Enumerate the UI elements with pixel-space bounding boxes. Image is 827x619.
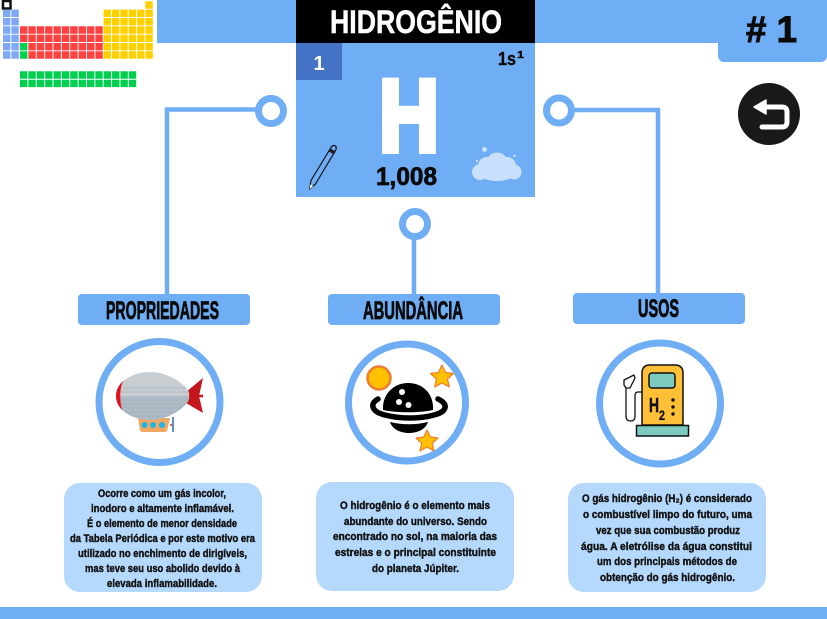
connector: usos — [546, 98, 658, 293]
electron configuration: 1s — [498, 49, 516, 69]
text block: propriedades — [64, 483, 262, 592]
heading: usos: USOS — [638, 295, 679, 323]
text block: propriedades: É o elemento de menor densidade — [87, 517, 237, 530]
element symbol: H — [379, 59, 439, 173]
icon: hydrogen fuel pump — [600, 343, 720, 464]
ranking number: # 1 — [746, 9, 797, 50]
text block: abundancia: encontrado no sol, na maioria das — [333, 531, 497, 543]
element number tab — [718, 9, 827, 62]
top bar — [157, 0, 827, 43]
atomic mass: 1,008 — [376, 163, 437, 191]
icon: cloud — [472, 147, 522, 181]
text block: propriedades: Ocorre como um gás incolor, — [98, 488, 226, 500]
title: HIDROGÊNIO — [330, 4, 502, 40]
text block: propriedades: inodoro e altamente inflamável. — [91, 503, 234, 515]
text block: propriedades: da Tabela Periódica e por este motivo era — [70, 533, 256, 545]
periodic table locator — [3, 1, 154, 83]
bottom bar — [0, 607, 827, 619]
text block: abundancia: abundante do universo. Sendo — [344, 516, 487, 528]
text block: propriedades: mas teve seu uso abolido devido à — [85, 563, 241, 575]
icon: planet and stars — [348, 344, 466, 461]
atomic number: 1 — [313, 53, 325, 75]
text block: usos: água. A eletrólise da água constitui — [581, 541, 752, 553]
heading: usos — [573, 293, 745, 324]
icon: hydrogen fuel pump: 2 — [659, 407, 665, 423]
text block: propriedades: elevada inflamabilidade. — [107, 578, 217, 590]
heading: propriedades — [78, 294, 250, 325]
electron configuration: 1 — [517, 50, 525, 61]
text block: usos: o combustível limpo do futuro, uma — [583, 509, 753, 521]
text block: abundancia: estrelas e o principal constituinte — [335, 547, 496, 559]
heading: abundancia: ABUNDÂNCIA — [363, 295, 463, 325]
atomic number — [296, 43, 342, 80]
heading: abundancia — [328, 294, 500, 325]
connector: abundancia — [402, 212, 428, 294]
text block: usos: obtenção do gás hidrogênio. — [600, 572, 735, 584]
text block: usos — [568, 483, 766, 592]
text block: usos: O gás hidrogênio (H₂) é considerado — [582, 493, 752, 505]
text block: abundancia: O hidrogênio é o elemento mais — [340, 500, 490, 512]
icon: pencil — [310, 146, 336, 189]
text block: usos: vez que sua combustão produz — [596, 525, 740, 537]
text block: propriedades: utilizado no enchimento de dirigíveis, — [78, 548, 247, 560]
connector: propriedades — [167, 98, 284, 294]
panel: element card — [296, 43, 535, 197]
text block: usos: um dos principais métodos de — [597, 556, 737, 568]
icon: hydrogen fuel pump: H — [649, 395, 659, 417]
heading: propriedades: PROPRIEDADES — [106, 297, 219, 325]
text block: abundancia: do planeta Júpiter. — [372, 563, 459, 575]
icon: airship — [99, 342, 220, 462]
back button — [738, 83, 800, 145]
text block: abundancia — [316, 482, 514, 591]
